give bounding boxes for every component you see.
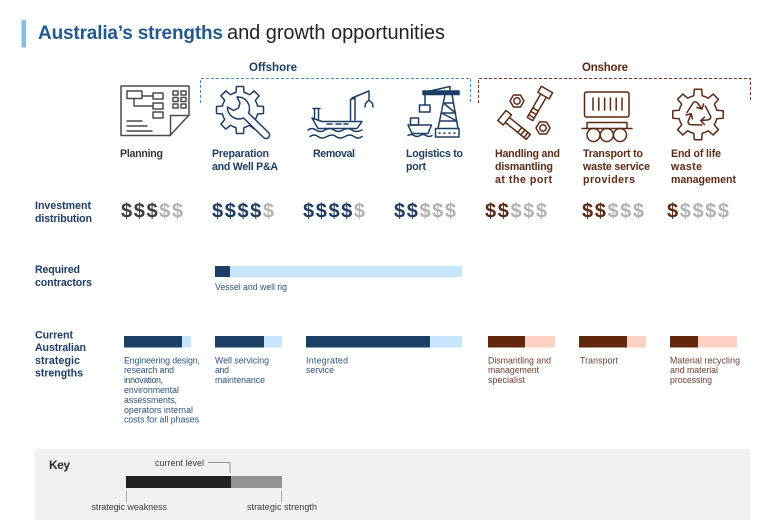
strength bar: integrated service: Integrated	[306, 355, 348, 365]
investment rating: transport 2 of 5: $$$$$	[582, 200, 644, 222]
stage label: preparation and well P&A: and Well P&A	[212, 161, 278, 173]
strength bar: planning: costs for all phases	[124, 415, 200, 425]
stage label: end of life: waste	[670, 161, 702, 173]
investment rating: preparation 4 of 5: $$$$$	[212, 200, 274, 222]
row label: required contractors	[35, 264, 92, 289]
stage label: handling and dismantling: at the port	[495, 174, 552, 186]
strength bar: integrated service: service	[306, 365, 334, 375]
stage label: transport: waste service	[582, 161, 650, 173]
key panel	[35, 449, 750, 520]
strength bar: planning: operators internal	[124, 405, 193, 415]
key panel: current level	[155, 458, 204, 468]
strength bar: material recycling: Material recycling	[670, 355, 740, 365]
strength bar: dismantling	[488, 336, 555, 385]
stage label: transport: providers	[583, 174, 635, 186]
strength bar: well servicing: and	[215, 365, 229, 375]
icon: vessel with crane	[308, 91, 373, 138]
strength bar: planning: environmental	[124, 385, 179, 395]
strength bar: transport	[579, 336, 646, 365]
strength bar: well servicing	[215, 336, 282, 385]
strength bar: well servicing: Well servicing	[215, 355, 269, 365]
icon: recycling gear	[673, 89, 723, 140]
strength bar: material recycling: processing	[670, 375, 712, 385]
row label: required contractors: contractors	[35, 277, 92, 289]
stage label: logistics to port: Logistics to	[406, 148, 464, 160]
row label: current strategic strengths: Australian	[35, 342, 86, 354]
row label: investment distribution: Investment	[35, 200, 91, 212]
title: Australia’s strengths	[38, 23, 223, 44]
stage label: end of life: End of life	[671, 148, 721, 160]
onshore heading and bracket: Onshore	[582, 62, 628, 74]
required contractors bar: vessel and well rig: Vessel and well rig	[215, 282, 287, 292]
stage label: logistics to port	[406, 148, 464, 173]
strength bar: dismantling: management	[488, 365, 540, 375]
icon: gear and wrench	[216, 86, 270, 139]
stage label: handling and dismantling	[495, 148, 560, 186]
row label: current strategic strengths	[35, 330, 86, 380]
row label: investment distribution: distribution	[35, 213, 92, 225]
stage label: transport: Transport to	[583, 148, 644, 160]
stage label: preparation and well P&A: Preparation	[212, 148, 269, 160]
icon: bolts and nuts	[498, 86, 553, 142]
strength bar: planning: Engineering design,	[124, 355, 200, 365]
strength bar: planning: innovation,	[124, 375, 163, 385]
key panel: strategic weakness	[92, 502, 168, 512]
title	[22, 20, 445, 48]
investment rating: planning 3 of 5: $$$$$	[121, 200, 183, 222]
row label: current strategic strengths: strengths	[35, 368, 83, 380]
stage label: handling and dismantling: dismantling	[495, 161, 553, 173]
strength bar: dismantling: specialist	[488, 375, 526, 385]
strength bar: integrated service	[306, 336, 462, 375]
stage label: logistics to port: port	[406, 161, 426, 173]
stage label: removal: Removal	[313, 148, 355, 160]
title: and growth opportunities	[227, 22, 445, 44]
strength bar: transport: Transport	[580, 355, 619, 365]
icon: planning document	[121, 86, 189, 136]
required contractors bar: vessel and well rig	[215, 266, 462, 292]
strength bar: material recycling	[670, 336, 740, 385]
investment rating: logistics 2 of 5: $$$$$	[394, 200, 456, 222]
row label: current strategic strengths: Current	[35, 330, 73, 342]
stage label: handling and dismantling: Handling and	[495, 148, 560, 160]
stage label: end of life	[670, 148, 736, 186]
strength bar: planning: assessments,	[124, 395, 177, 405]
key panel: Key	[49, 458, 70, 472]
stage label: transport	[582, 148, 650, 186]
key panel: strategic strength	[247, 502, 317, 512]
stage label: planning: Planning	[120, 148, 163, 160]
icon: port crane and ship	[408, 86, 459, 137]
stage label: end of life: management	[671, 174, 736, 186]
strength bar: well servicing: maintenance	[215, 375, 265, 385]
strength bar: planning: research and	[124, 365, 174, 375]
row label: investment distribution	[35, 200, 92, 225]
investment rating: handling 2 of 5: $$$$$	[485, 200, 547, 222]
strength bar: material recycling: and material	[670, 365, 718, 375]
row label: current strategic strengths: strategic	[35, 355, 80, 367]
strength bar: dismantling: Dismantling and	[488, 355, 551, 365]
offshore heading and bracket	[200, 62, 470, 103]
investment rating: end of life 1 of 5: $$$$$	[667, 200, 729, 222]
investment rating: removal 4 of 5: $$$$$	[303, 200, 365, 222]
offshore heading and bracket: Offshore	[249, 62, 297, 74]
strength bar: planning	[124, 336, 200, 425]
stage label: preparation and well P&A	[212, 148, 278, 173]
onshore heading and bracket	[478, 62, 750, 103]
icon: container on rail wagon	[582, 92, 632, 142]
row label: required contractors: Required	[35, 264, 80, 276]
